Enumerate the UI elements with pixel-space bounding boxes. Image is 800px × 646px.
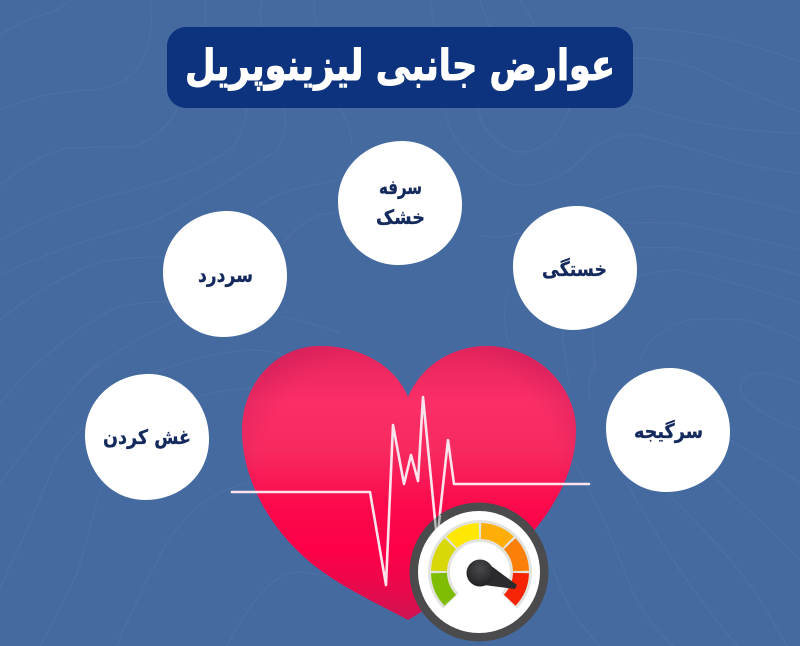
bubble: fainting: [85, 374, 209, 500]
title text: عوارض جانبی لیزینوپریل: [185, 41, 615, 91]
bubble: dizziness: سرگیجه: [634, 419, 703, 443]
bubble: dry cough: سرفه: [379, 175, 422, 199]
heart illustration: [242, 346, 576, 620]
gauge needle: [466, 560, 517, 589]
title banner: [167, 27, 633, 108]
heartbeat line: [232, 397, 589, 585]
speedometer gauge: [410, 502, 548, 642]
heartbeat overlap on gauge: [434, 515, 440, 540]
bubble: dry cough: [338, 141, 462, 265]
bubble: headache: [163, 211, 287, 337]
bubble: dizziness: [606, 368, 730, 492]
bubble: fatigue: [513, 206, 637, 330]
bubble: fatigue: خستگی: [542, 257, 607, 281]
bubble: dry cough: خشک: [376, 205, 425, 229]
bubble: fainting: غش کردن: [103, 425, 191, 449]
bubble: headache: سردرد: [198, 263, 253, 287]
